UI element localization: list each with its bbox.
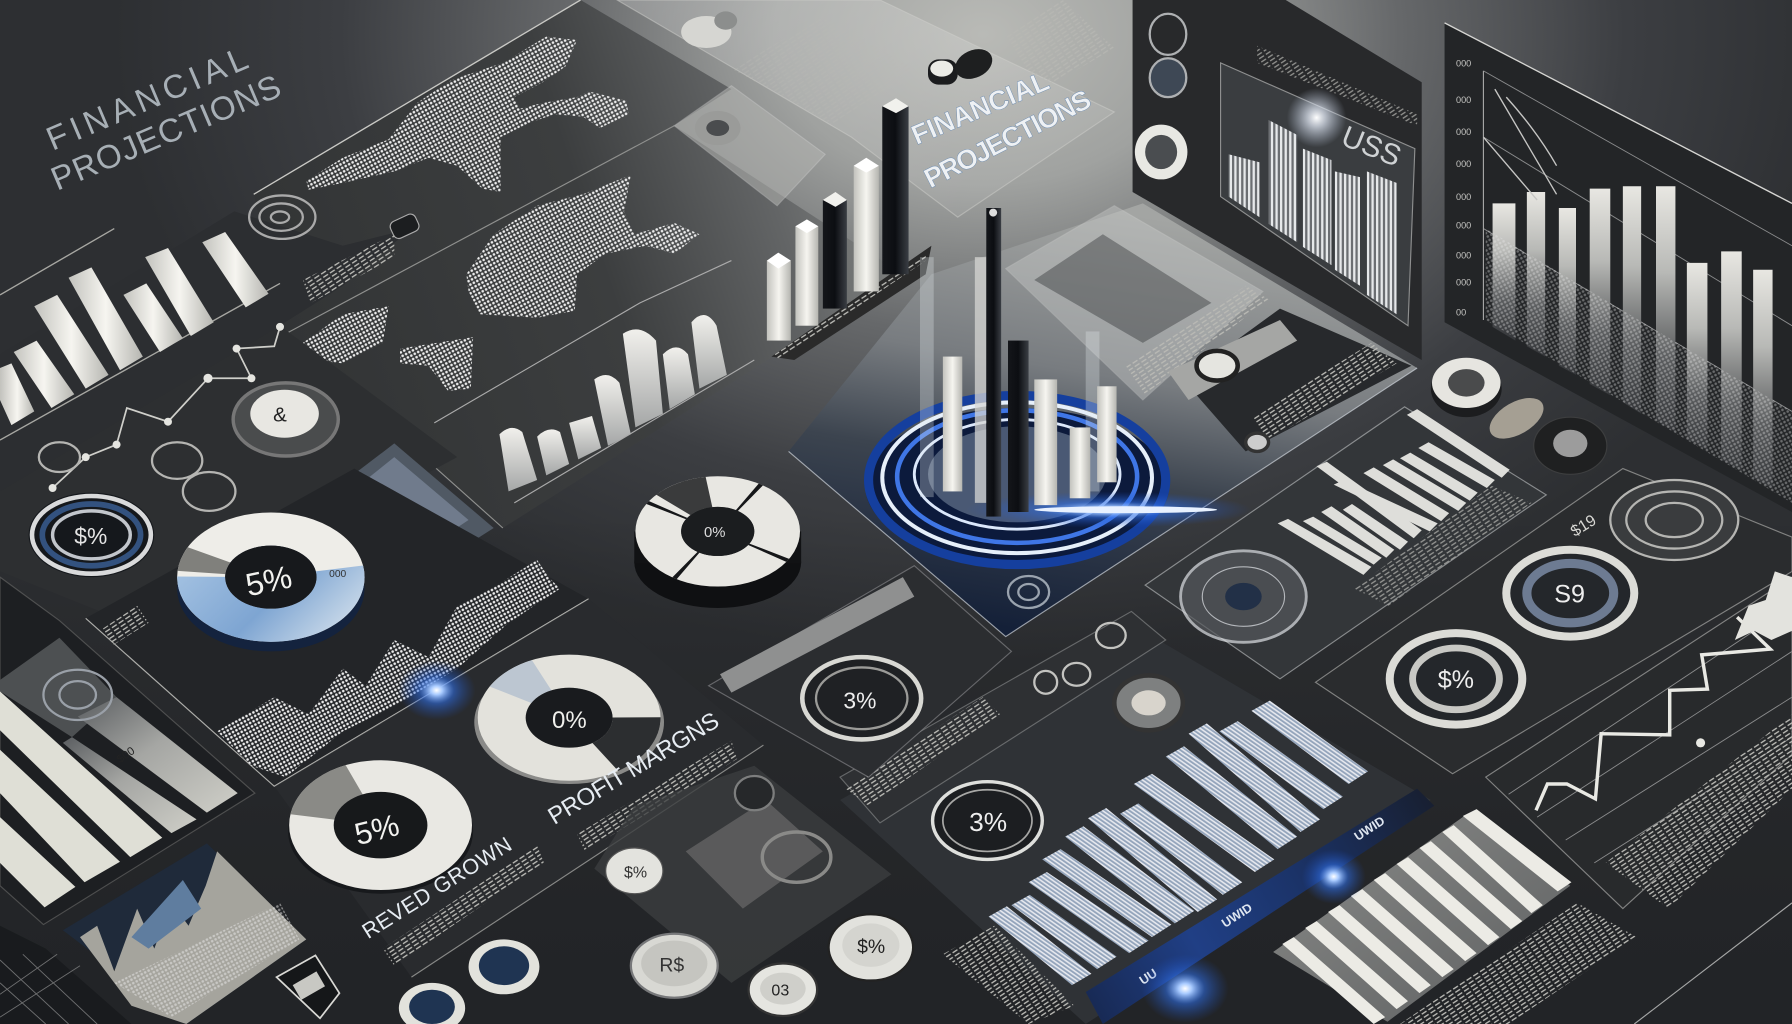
axis labels: 000 (1456, 95, 1471, 105)
panel: second map with bars (286, 126, 903, 528)
text lines (383, 846, 544, 966)
chart: sketched line (1483, 89, 1557, 200)
chart: donut four: 5% (351, 807, 403, 852)
icon: ring knob (762, 832, 831, 882)
panel: left stripes (0, 577, 255, 925)
glow flare (1287, 88, 1346, 147)
axis labels: 000 (1456, 192, 1471, 202)
button: blue ring small (399, 983, 465, 1024)
heading: financial projections center: FINANCIAL (907, 65, 1054, 151)
icon: percent ring (802, 657, 921, 739)
panel: blue bar chart (840, 631, 1434, 1024)
chart: soft bars (499, 315, 727, 491)
axis labels: 000 (1456, 278, 1471, 288)
panel: bottom-left corner (0, 926, 131, 1024)
chart: strand bars (1229, 120, 1397, 314)
text lines (1006, 0, 1114, 91)
axis labels: 00 (1456, 307, 1466, 317)
icon: small chip (277, 955, 339, 1018)
icon: speckled capsule (1483, 390, 1550, 447)
glow flare (1302, 849, 1366, 904)
icon: outline shields (1150, 14, 1186, 97)
icon: chrome knob (1114, 675, 1183, 730)
bar (854, 158, 879, 291)
icon: glass sphere (1181, 551, 1306, 642)
icon: black knob (928, 43, 997, 85)
chart: white peak (1735, 571, 1792, 640)
text lines (943, 926, 1074, 1024)
icon: plate ring (1008, 576, 1049, 608)
strip labels: UWID (1219, 901, 1255, 931)
icon: small square chip (388, 212, 421, 240)
icon: spiral (249, 195, 315, 239)
axis labels: 000 (1456, 250, 1471, 260)
panel: concentric rings (1315, 469, 1792, 774)
icon: mini charts (686, 800, 823, 909)
panel: mountain image (63, 843, 306, 1024)
heading: financial projections center: PROJECTIONS (919, 83, 1096, 194)
chart: line (53, 327, 280, 488)
axis labels: 000 (1456, 127, 1471, 137)
chart: faded bars (1493, 186, 1773, 489)
icon: medallion (233, 383, 338, 456)
bar (882, 98, 909, 274)
text lines (303, 234, 394, 303)
panel: profit margins (274, 599, 763, 977)
panel: right big chart (1445, 23, 1792, 512)
chart: donut four (288, 768, 473, 894)
glow flare (398, 661, 475, 720)
button: silver: R$ (659, 954, 684, 976)
label: USS (1337, 120, 1406, 173)
bar (795, 219, 818, 326)
heading: revenue growth: REVED GROWN (357, 832, 516, 944)
blue strip (1086, 789, 1434, 1024)
glow flare (1142, 954, 1229, 1023)
chart: donut three: 0% (552, 707, 587, 734)
panel: glass list (1006, 206, 1269, 400)
button: silver (631, 934, 718, 998)
panel: glass top panels (617, 0, 1114, 217)
button: white dark: $% (857, 936, 885, 958)
button: white: $% (624, 865, 647, 882)
text lines (577, 741, 737, 851)
chart: donut three (474, 654, 664, 784)
strip labels (1137, 814, 1387, 988)
heading: financial projections left: PROJECTIONS (46, 68, 286, 198)
chart: glowing ring (865, 395, 1251, 565)
icon: outline ring (735, 776, 774, 810)
bars (1282, 809, 1571, 1024)
panel: right screen (1133, 0, 1422, 360)
text lines (103, 606, 149, 646)
small label: $19 (1568, 512, 1600, 541)
bars (0, 232, 269, 425)
strip labels: UWID (1352, 814, 1387, 844)
icon: pill (1197, 351, 1238, 381)
icon: ring button (1135, 125, 1187, 179)
icon: percent badge: 3% (969, 807, 1007, 837)
axis labels: 000 (1456, 159, 1471, 169)
icon: percent badge (933, 782, 1042, 859)
chart: white spikes (1278, 409, 1510, 575)
icon: knob top (695, 111, 741, 145)
decorative bottom right line (1634, 903, 1792, 1024)
heading: profit margins: PROFIT MARGNS (543, 707, 724, 830)
chart: striped bars (989, 701, 1368, 985)
panel: glass spike chart (1145, 407, 1546, 679)
button: white: 03 (771, 982, 789, 999)
chart: dotted world map top (306, 37, 629, 192)
panel: lower buttons area (594, 766, 891, 983)
chart: donut two: 0% (704, 525, 725, 541)
panel: top-left bar chart (0, 195, 421, 503)
donut ring: lower: $% (1438, 666, 1474, 694)
axis labels (1456, 58, 1471, 317)
chart: dotted mountains (217, 560, 560, 777)
panel: line chart (0, 323, 494, 617)
panel: top map (254, 0, 731, 331)
icon: glass ring (43, 670, 112, 720)
bar (823, 192, 847, 309)
icon: medallion: & (273, 404, 287, 427)
text block: fine lines right (1606, 714, 1792, 909)
donut ring: upper (1506, 550, 1634, 637)
bars: gray (63, 697, 238, 833)
donut ring: upper: S9 (1554, 580, 1585, 608)
panel: toolbar row (840, 611, 1166, 823)
chart: central bars (920, 208, 1117, 517)
glow flare (966, 491, 1251, 528)
chart: zigzag (1536, 617, 1770, 810)
chart: donut (177, 521, 365, 651)
panel: zigzag line chart (1486, 571, 1792, 909)
icons: small rings (1034, 623, 1126, 694)
axis labels: 000 (1456, 58, 1471, 68)
icon: ring (1246, 433, 1269, 451)
text block: fine lines bottom (1400, 903, 1637, 1024)
button: blue ring (469, 939, 539, 994)
panel: mid list (709, 566, 1011, 777)
panel: dark list (1168, 309, 1411, 451)
icon: white ring (1431, 358, 1502, 417)
icon: percent ring: 3% (843, 688, 876, 714)
chart: donut two (634, 475, 802, 608)
heading: financial projections left: FINANCIAL (41, 40, 253, 158)
buttons: bottom row (399, 914, 1074, 1024)
bars: white (0, 691, 162, 907)
icons: small cluster right (1431, 358, 1607, 474)
chart: dotted world map middle (466, 175, 699, 318)
panel: small glass image (331, 443, 494, 562)
icon: blue ring badge: $% (74, 523, 107, 549)
icon: top pill (681, 11, 737, 48)
button: white (749, 963, 817, 1016)
chart: donut: 000 (329, 569, 347, 580)
icon: outline rings (39, 442, 235, 511)
strip labels: UU (1137, 966, 1160, 988)
button: white dark (829, 914, 913, 981)
donut ring: lower (1390, 633, 1522, 725)
icon: black knob (1534, 417, 1607, 474)
chart: donut: 5% (242, 558, 295, 603)
chart: dotted small map (303, 306, 473, 391)
small label: $00 (115, 745, 137, 766)
icon: blue ring badge (29, 493, 154, 577)
chart: raised top bars (767, 98, 931, 360)
panel: donut one (86, 469, 589, 786)
panel: central plate (789, 203, 1417, 637)
button: white (606, 848, 663, 894)
icon: glass ring top (1610, 480, 1738, 560)
axis labels: 000 (1456, 221, 1471, 231)
panel: white stripes bottom right (1273, 809, 1571, 1024)
bar (767, 253, 791, 341)
